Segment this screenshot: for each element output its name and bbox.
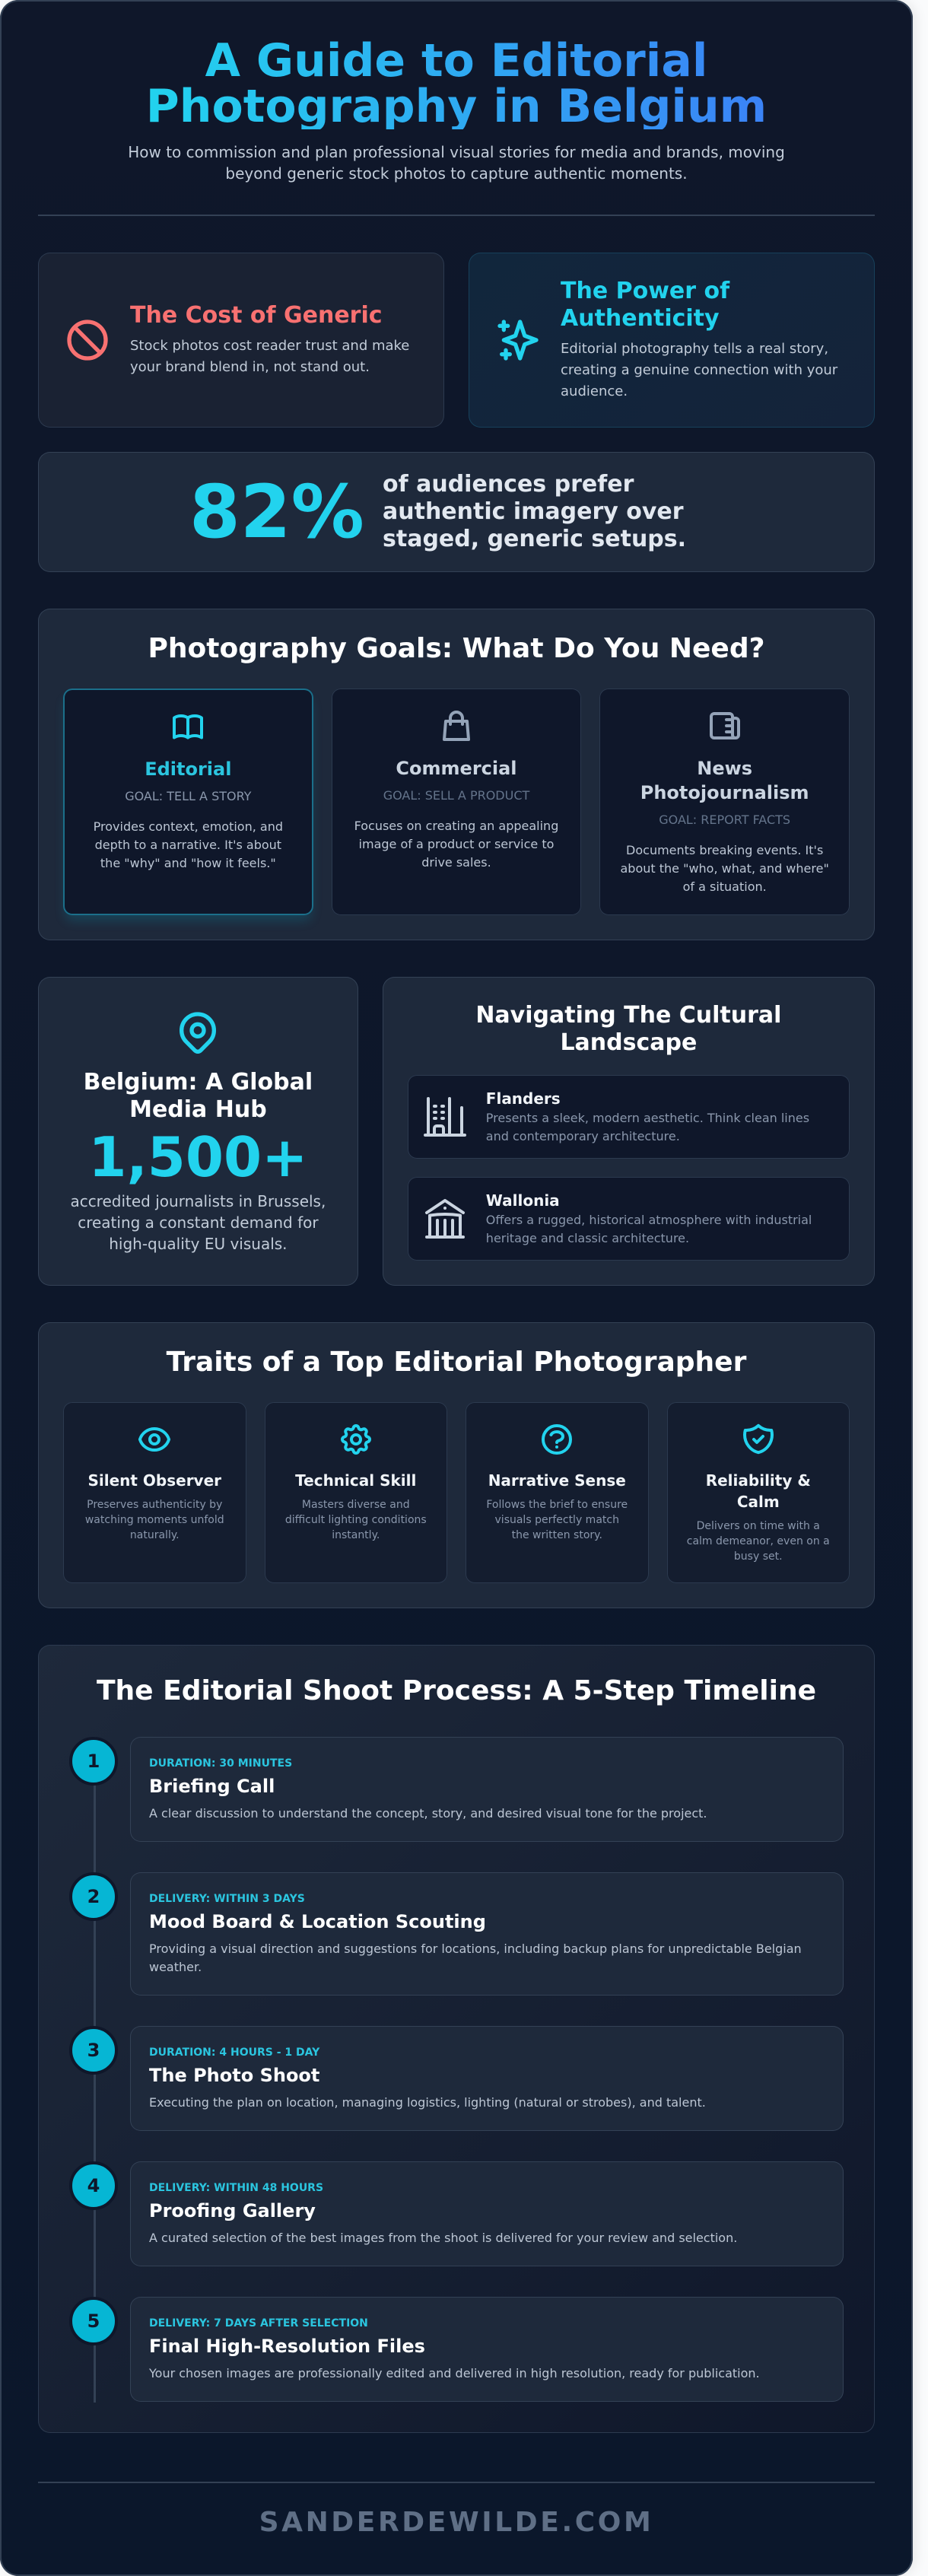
text: cost description: Stock photos cost reader trust and make [130, 338, 409, 354]
step 2 text: weather. [149, 1960, 202, 1974]
card text: silent observer [85, 1499, 224, 1541]
card text: commercial: image of a product or service to [359, 837, 554, 851]
header title [145, 38, 768, 129]
statistic text: of audiences prefer [383, 471, 634, 498]
heading: navigating the cultural landscape: Navigating The Cultural [475, 1002, 781, 1029]
heading: the power of authenticity [561, 278, 730, 332]
panel: editorial shoot process timeline [38, 1645, 875, 2433]
card text: reliability and calm: Delivers on time with a [697, 1520, 820, 1532]
step 5 number: 5 [87, 2310, 100, 2332]
card: reliability and calm [666, 1402, 850, 1583]
icon: question mark [542, 1424, 572, 1455]
card: editorial [63, 689, 313, 915]
step 3 timing label: DURATION: 4 HOURS - 1 DAY [149, 2046, 319, 2059]
heading: belgium a global media hub: Belgium: A Global [84, 1069, 313, 1096]
card title: flanders: Flanders [486, 1089, 561, 1108]
card text: news: Documents breaking events. It's [626, 843, 823, 857]
step 2 text: Providing a visual direction and suggestions for locations, including backup plans for unpredictable Belgian [149, 1942, 802, 1956]
heading: the power of authenticity: Authenticity [561, 305, 720, 332]
card text: technical skill: difficult lighting conditions [285, 1514, 427, 1526]
text: accredited journalists: accredited journalists in Brussels, [70, 1192, 326, 1210]
icon: modern buildings [424, 1097, 466, 1137]
card text: technical skill: Masters diverse and [302, 1499, 410, 1511]
card text: wallonia: Offers a rugged, historical atmosphere with industrial [486, 1213, 812, 1227]
card text: reliability and calm: busy set. [734, 1550, 783, 1563]
heading: the power of authenticity: The Power of [561, 278, 729, 304]
card text: silent observer: Preserves authenticity by [87, 1499, 222, 1511]
card text: wallonia [486, 1213, 812, 1245]
step 3 title: The Photo Shoot [149, 2065, 319, 2086]
panel: navigating the cultural landscape [383, 977, 875, 1286]
step 4 title: Proofing Gallery [149, 2200, 316, 2221]
text: authenticity description: creating a genuine connection with your [561, 362, 837, 378]
text: accredited journalists: creating a constant demand for [78, 1213, 319, 1232]
card title: news photojournalism: Photojournalism [640, 782, 809, 803]
icon: shield check [743, 1424, 774, 1455]
panel: the power of authenticity [469, 253, 875, 428]
card text: narrative sense: Follows the brief to ensure [486, 1499, 628, 1511]
card: narrative sense [466, 1402, 648, 1583]
goal label: report facts: GOAL: REPORT FACTS [659, 813, 790, 827]
card: commercial [332, 689, 581, 915]
step 4 card [130, 2161, 844, 2266]
card text: reliability and calm [687, 1520, 830, 1563]
text: authenticity description: audience. [561, 383, 628, 399]
card text: news: of a situation. [683, 879, 767, 894]
step 2 card [130, 1872, 844, 1996]
step 3 number: 3 [87, 2040, 100, 2061]
statistic text [383, 471, 686, 552]
card text: narrative sense [486, 1499, 628, 1541]
card title: news photojournalism [640, 758, 809, 803]
icon: sparkles [497, 320, 539, 361]
card text: flanders: Presents a sleek, modern aesthetic. Think clean lines [486, 1111, 809, 1125]
card text: narrative sense: visuals perfectly match [495, 1514, 619, 1526]
step 2 text [149, 1942, 802, 1974]
card text: commercial [354, 819, 558, 870]
card text: news: about the "who, what, and where" [621, 861, 829, 876]
icon: location pin [180, 1012, 216, 1054]
card title: narrative sense: Narrative Sense [488, 1471, 626, 1490]
icon: book [173, 714, 203, 739]
panel: the cost of generic [38, 253, 444, 428]
step 1 timing label: DURATION: 30 MINUTES [149, 1757, 292, 1770]
icon: classic building [424, 1199, 466, 1239]
panel: belgium media hub [38, 977, 358, 1286]
icon: newspaper [710, 712, 740, 739]
card text: editorial: the "why" and "how it feels." [100, 856, 276, 870]
card text: technical skill [285, 1499, 427, 1541]
step 5 text: Your chosen images are professionally edited and delivered in high resolution, ready for publication. [149, 2366, 760, 2380]
panel: 82% statistic [38, 452, 875, 572]
card title: technical skill: Technical Skill [295, 1471, 416, 1490]
card: silent observer [63, 1402, 246, 1583]
step 5 timing label: DELIVERY: 7 DAYS AFTER SELECTION [149, 2317, 368, 2330]
header subtitle [128, 143, 785, 183]
card: wallonia [408, 1177, 850, 1261]
step 1 card [130, 1737, 844, 1842]
statistic: 1,500+: 1,500+ [88, 1125, 307, 1189]
text: accredited journalists [70, 1192, 326, 1253]
panel: photography goals [38, 609, 875, 940]
heading: photography goals: Photography Goals: What Do You Need? [148, 633, 764, 664]
card: news photojournalism [599, 689, 850, 915]
card title: wallonia: Wallonia [486, 1191, 560, 1210]
card text: silent observer: watching moments unfold [85, 1514, 224, 1526]
heading: the cost of generic: The Cost of Generic [130, 302, 383, 329]
step 3 text: Executing the plan on location, managing logistics, lighting (natural or strobes), and talent. [149, 2095, 706, 2110]
statistic number: 82% [189, 469, 364, 555]
step 5 card [130, 2297, 844, 2402]
step 3 card [130, 2026, 844, 2131]
panel: traits of a top editorial photographer [38, 1322, 875, 1608]
header title: Photography in Belgium [146, 80, 767, 133]
card title: commercial: Commercial [396, 758, 517, 779]
icon: shopping bag [443, 711, 470, 741]
step 2 title: Mood Board & Location Scouting [149, 1911, 486, 1932]
step 2 timing label: DELIVERY: WITHIN 3 DAYS [149, 1893, 305, 1905]
icon: eye [138, 1427, 170, 1452]
card text: narrative sense: the written story. [512, 1529, 602, 1541]
card text: flanders [486, 1111, 809, 1143]
statistic text: staged, generic setups. [383, 526, 686, 552]
step 2 number: 2 [87, 1886, 100, 1907]
text: authenticity description: Editorial photography tells a real story, [561, 341, 828, 357]
card text: wallonia: heritage and classic architecture. [486, 1231, 689, 1245]
step 1 number: 1 [87, 1751, 100, 1772]
card text: silent observer: naturally. [130, 1529, 180, 1541]
footer website: SANDERDEWILDE.COM [259, 2507, 653, 2538]
heading: navigating the cultural landscape [475, 1002, 781, 1056]
header subtitle: How to commission and plan professional visual stories for media and brands, moving [128, 143, 785, 161]
step 2 number [69, 1872, 118, 1921]
card title: silent observer: Silent Observer [87, 1471, 221, 1490]
card text: commercial: Focuses on creating an appealing [354, 819, 558, 833]
step 1 title: Briefing Call [149, 1776, 275, 1797]
text: cost description: your brand blend in, not stand out. [130, 359, 370, 375]
heading: timeline: The Editorial Shoot Process: A 5-Step Timeline [97, 1675, 816, 1706]
goal label: tell a story: GOAL: TELL A STORY [125, 789, 251, 803]
card text: commercial: drive sales. [421, 855, 491, 870]
step 1 text: A clear discussion to understand the concept, story, and desired visual tone for the project. [149, 1806, 707, 1821]
step 5 number [69, 2297, 118, 2345]
card title: reliability and calm: Reliability & [706, 1471, 811, 1490]
card text: editorial: Provides context, emotion, and [94, 819, 283, 834]
step 4 text: A curated selection of the best images from the shoot is delivered for your review and selection. [149, 2231, 737, 2245]
card text: flanders: and contemporary architecture. [486, 1129, 680, 1143]
card title: news photojournalism: News [697, 758, 752, 779]
card title: reliability and calm [706, 1471, 811, 1511]
heading: belgium a global media hub: Media Hub [129, 1096, 267, 1123]
text: authenticity description [561, 341, 838, 399]
header title: A Guide to Editorial [205, 34, 707, 87]
step 1 number [69, 1737, 118, 1786]
icon: cog [341, 1424, 371, 1455]
step 3 number [69, 2026, 118, 2075]
text: cost description [130, 338, 409, 375]
step 4 number [69, 2161, 118, 2210]
card title: reliability and calm: Calm [737, 1493, 780, 1511]
statistic text: authentic imagery over [383, 498, 684, 525]
card text: reliability and calm: calm demeanor, even on a [687, 1535, 830, 1547]
step 4 number: 4 [87, 2175, 100, 2196]
icon: ban [67, 320, 108, 361]
heading: traits: Traits of a Top Editorial Photographer [167, 1347, 746, 1378]
goal label: sell a product: GOAL: SELL A PRODUCT [383, 788, 529, 803]
header subtitle: beyond generic stock photos to capture authentic moments. [225, 164, 688, 183]
text: accredited journalists: high-quality EU visuals. [109, 1235, 288, 1253]
card text: news [621, 843, 829, 894]
card text: editorial [94, 819, 283, 870]
step 5 title: Final High-Resolution Files [149, 2336, 425, 2357]
step 4 timing label: DELIVERY: WITHIN 48 HOURS [149, 2182, 323, 2194]
card: flanders [408, 1075, 850, 1159]
card text: technical skill: instantly. [332, 1529, 380, 1541]
heading: navigating the cultural landscape: Landscape [560, 1029, 697, 1056]
card title: editorial: Editorial [145, 758, 231, 780]
heading: belgium a global media hub [84, 1069, 313, 1123]
card text: editorial: depth to a narrative. It's about [95, 838, 281, 852]
card: technical skill [265, 1402, 447, 1583]
